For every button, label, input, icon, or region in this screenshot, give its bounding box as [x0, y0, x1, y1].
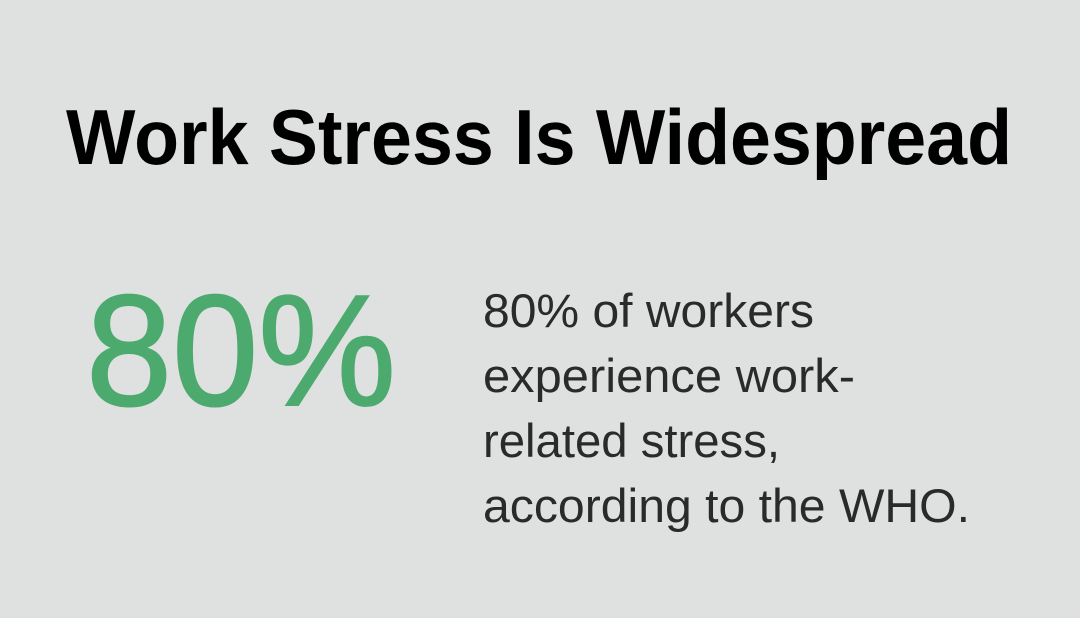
- description text block: according to the WHO.: [483, 479, 970, 532]
- description text block: [483, 284, 970, 532]
- description text block: experience work-: [483, 349, 855, 402]
- title: Work Stress Is Widespread: [66, 93, 1012, 181]
- big stat: 80%: 80%: [86, 263, 396, 439]
- description text block: 80% of workers: [483, 284, 814, 337]
- description text block: related stress,: [483, 414, 780, 467]
